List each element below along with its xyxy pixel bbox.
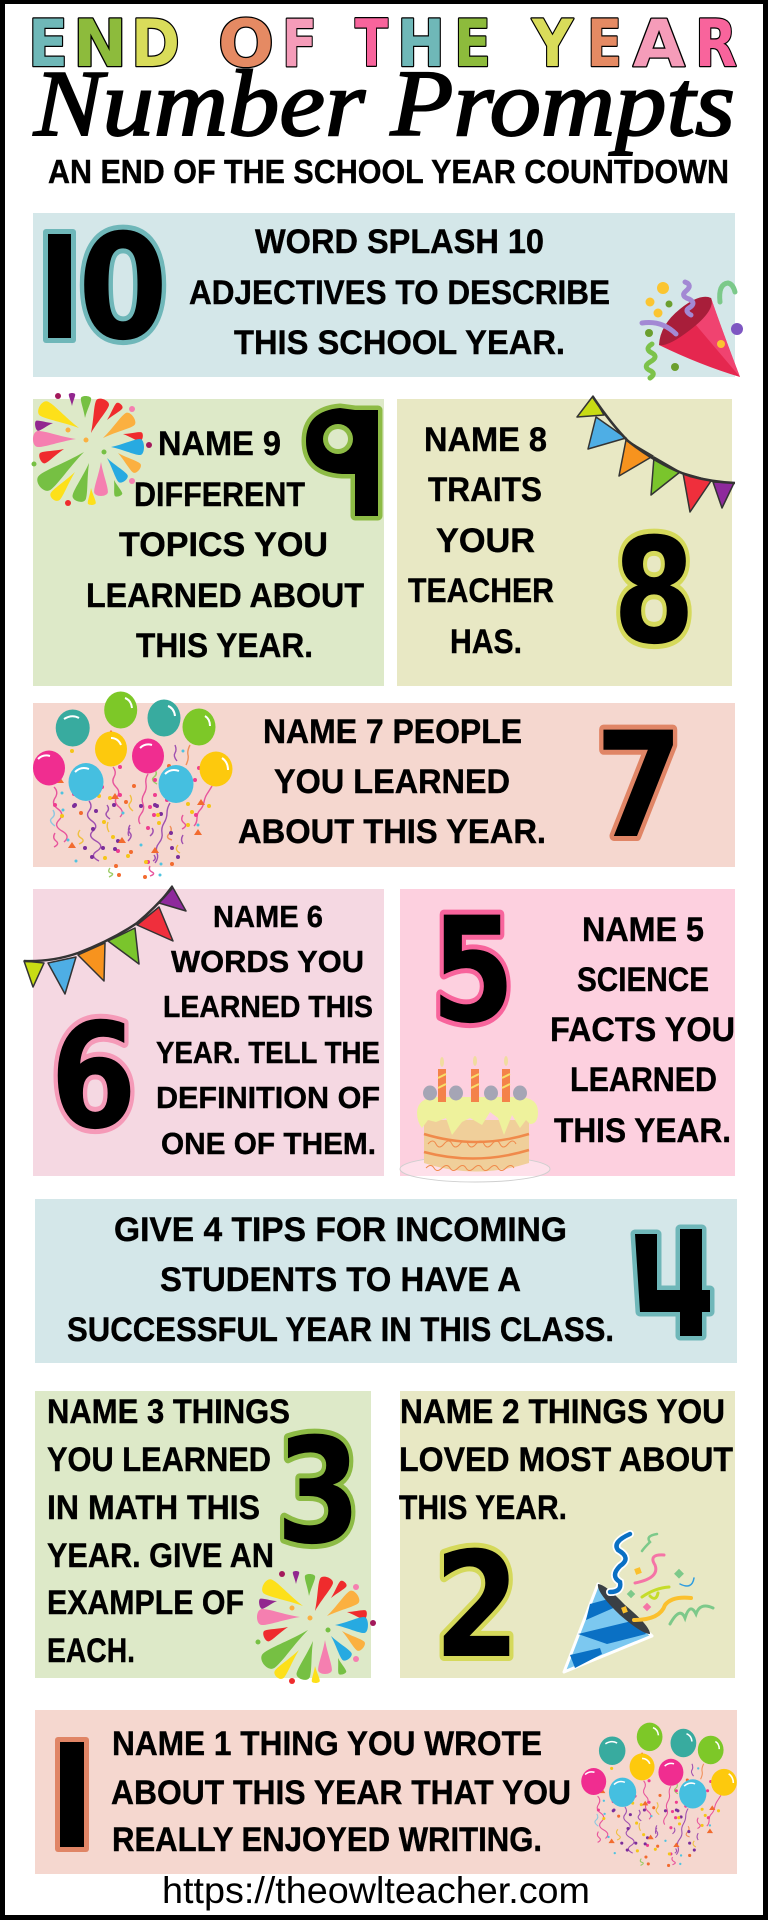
text: prompt 9: DIFFERENT xyxy=(134,476,305,514)
text: prompt 1: ABOUT THIS YEAR THAT YOU xyxy=(111,1774,571,1812)
panel: prompt 5 xyxy=(400,886,735,1182)
number 4: 4 xyxy=(682,1235,700,1347)
icon: balloons and confetti xyxy=(581,1723,737,1865)
title: End of the Year: O xyxy=(218,7,274,82)
text: prompt 5: SCIENCE xyxy=(577,961,709,999)
balloon: teal xyxy=(56,710,90,746)
text: prompt 4: GIVE 4 TIPS FOR INCOMING xyxy=(114,1211,567,1249)
title: End of the Year: A xyxy=(633,7,685,82)
text: prompt 6: ONE OF THEM. xyxy=(161,1126,376,1161)
icon: birthday cake xyxy=(400,1056,550,1182)
text: prompt 9: NAME 9 xyxy=(158,425,281,463)
text: prompt 3: EACH. xyxy=(47,1632,135,1670)
balloon: yellow 2 xyxy=(200,752,232,786)
title: Number Prompts: Number Prompts xyxy=(33,52,735,156)
balloon: teal 2 xyxy=(148,700,180,736)
text: prompt 8: NAME 8 xyxy=(424,421,547,459)
text: prompt 5: NAME 5 xyxy=(582,911,704,949)
balloon: cyan 2 xyxy=(158,765,194,803)
panel: prompt 1: 1 xyxy=(62,1741,82,1864)
text: prompt 6: YEAR. TELL THE xyxy=(156,1035,380,1070)
text: prompt 1 xyxy=(111,1725,571,1859)
text: 9 xyxy=(357,411,376,528)
text: prompt 5: LEARNED xyxy=(570,1061,717,1099)
icon: bunting xyxy=(24,886,186,994)
text: prompt 7: ABOUT THIS YEAR. xyxy=(238,813,546,851)
text: prompt 7 xyxy=(238,713,546,851)
text: prompt 1: REALLY ENJOYED WRITING. xyxy=(112,1821,542,1859)
title: End of the Year xyxy=(28,7,737,82)
title: End of the Year: Y xyxy=(531,7,574,82)
text: prompt 2: LOVED MOST ABOUT xyxy=(399,1441,733,1479)
text: prompt 10 xyxy=(189,223,610,362)
text: prompt 9: LEARNED ABOUT xyxy=(86,577,364,615)
icon: fireworks xyxy=(257,1571,373,1683)
text: prompt 8: HAS. xyxy=(450,623,522,661)
text: prompt 9 xyxy=(86,425,364,665)
icon: balloons and confetti xyxy=(33,692,232,877)
number 8: 8 xyxy=(613,507,695,677)
text: prompt 6: WORDS YOU xyxy=(171,944,364,979)
text: prompt 3: YOU LEARNED xyxy=(47,1441,271,1479)
balloon: cyan xyxy=(68,763,104,801)
text: prompt 4: SUCCESSFUL YEAR IN THIS CLASS. xyxy=(67,1311,614,1349)
text: prompt 3 xyxy=(47,1393,290,1670)
text: prompt 5: THIS YEAR. xyxy=(554,1112,731,1150)
balloon: pink xyxy=(132,738,164,774)
text: prompt 4: STUDENTS TO HAVE A xyxy=(160,1261,521,1299)
text: prompt 10: WORD SPLASH 10 xyxy=(255,223,544,261)
number 5: 5 xyxy=(431,886,515,1056)
text: prompt 8: TEACHER xyxy=(408,572,554,610)
number 10: 0 xyxy=(78,203,168,373)
number 7: 7 xyxy=(595,701,683,871)
number 1 xyxy=(55,1737,89,1864)
text: prompt 7: NAME 7 PEOPLE xyxy=(263,713,522,751)
title: End of the Year: E xyxy=(587,7,622,82)
text: prompt 5 xyxy=(550,911,735,1150)
text: prompt 5: FACTS YOU xyxy=(550,1011,735,1049)
text: prompt 3: EXAMPLE OF xyxy=(47,1584,244,1622)
panel: prompt 9 xyxy=(33,393,384,686)
text: prompt 8 xyxy=(408,421,554,661)
number 6: 6 xyxy=(50,992,137,1162)
text: prompt 6 xyxy=(156,899,380,1161)
number 10 xyxy=(43,203,168,373)
number 9 xyxy=(306,408,378,528)
title: End of the Year: R xyxy=(695,7,737,82)
icon: blue party popper xyxy=(564,1534,713,1672)
balloon: pink 2 xyxy=(33,750,65,786)
text: prompt 2: NAME 2 THINGS YOU xyxy=(400,1393,725,1431)
panel: prompt 4 xyxy=(35,1199,737,1363)
panel: prompt 2 xyxy=(399,1391,735,1691)
text: prompt 10: ADJECTIVES TO DESCRIBE xyxy=(189,274,610,312)
text: prompt 9: TOPICS YOU xyxy=(119,526,328,564)
panel: prompt 10 xyxy=(33,203,743,378)
number 10: 1 xyxy=(50,231,69,354)
text: prompt 8: TRAITS xyxy=(428,471,542,509)
balloon: yellow xyxy=(95,732,127,766)
title: End of the Year: F xyxy=(282,7,317,82)
title: End of the Year: E xyxy=(28,7,68,82)
text: prompt 3: IN MATH THIS xyxy=(47,1489,260,1527)
text: prompt 6: NAME 6 xyxy=(213,899,323,934)
text: prompt 3: YEAR. GIVE AN xyxy=(47,1537,274,1575)
icon: fireworks xyxy=(33,393,149,505)
text: prompt 2 xyxy=(399,1393,733,1527)
text: prompt 2: THIS YEAR. xyxy=(399,1489,567,1527)
text: prompt 9: THIS YEAR. xyxy=(136,627,313,665)
balloon: green xyxy=(104,692,137,728)
text: prompt 10: THIS SCHOOL YEAR. xyxy=(234,324,565,362)
title: End of the Year: N xyxy=(73,7,127,82)
title: End of the Year: D xyxy=(131,7,180,82)
footer url: https://theowlteacher.com xyxy=(162,1870,590,1911)
text: prompt 1: NAME 1 THING YOU WROTE xyxy=(112,1725,542,1763)
title: End of the Year: T xyxy=(355,7,388,82)
text: prompt 4 xyxy=(67,1211,614,1349)
text: prompt 6: DEFINITION OF xyxy=(156,1080,380,1115)
panel: prompt 3 xyxy=(35,1391,373,1683)
icon: bunting xyxy=(577,396,735,512)
subtitle: AN END OF THE SCHOOL YEAR COUNTDOWN xyxy=(48,153,729,190)
panel: prompt 6 xyxy=(24,886,384,1176)
icon: red party popper xyxy=(642,282,743,378)
text: prompt 3: NAME 3 THINGS xyxy=(47,1393,290,1431)
title: End of the Year: E xyxy=(454,7,491,82)
text: prompt 8: YOUR xyxy=(436,522,535,560)
title: End of the Year: H xyxy=(397,7,445,82)
panel: prompt 8 xyxy=(397,396,735,686)
text: prompt 7: YOU LEARNED xyxy=(274,763,510,801)
number 4 xyxy=(635,1229,710,1347)
number 2: 2 xyxy=(434,1521,520,1691)
balloon: green 2 xyxy=(182,708,216,746)
number 3: 3 xyxy=(276,1407,361,1577)
panel: prompt 7 xyxy=(33,692,735,877)
panel: prompt 1 xyxy=(35,1710,737,1874)
text: prompt 6: LEARNED THIS xyxy=(163,989,373,1024)
